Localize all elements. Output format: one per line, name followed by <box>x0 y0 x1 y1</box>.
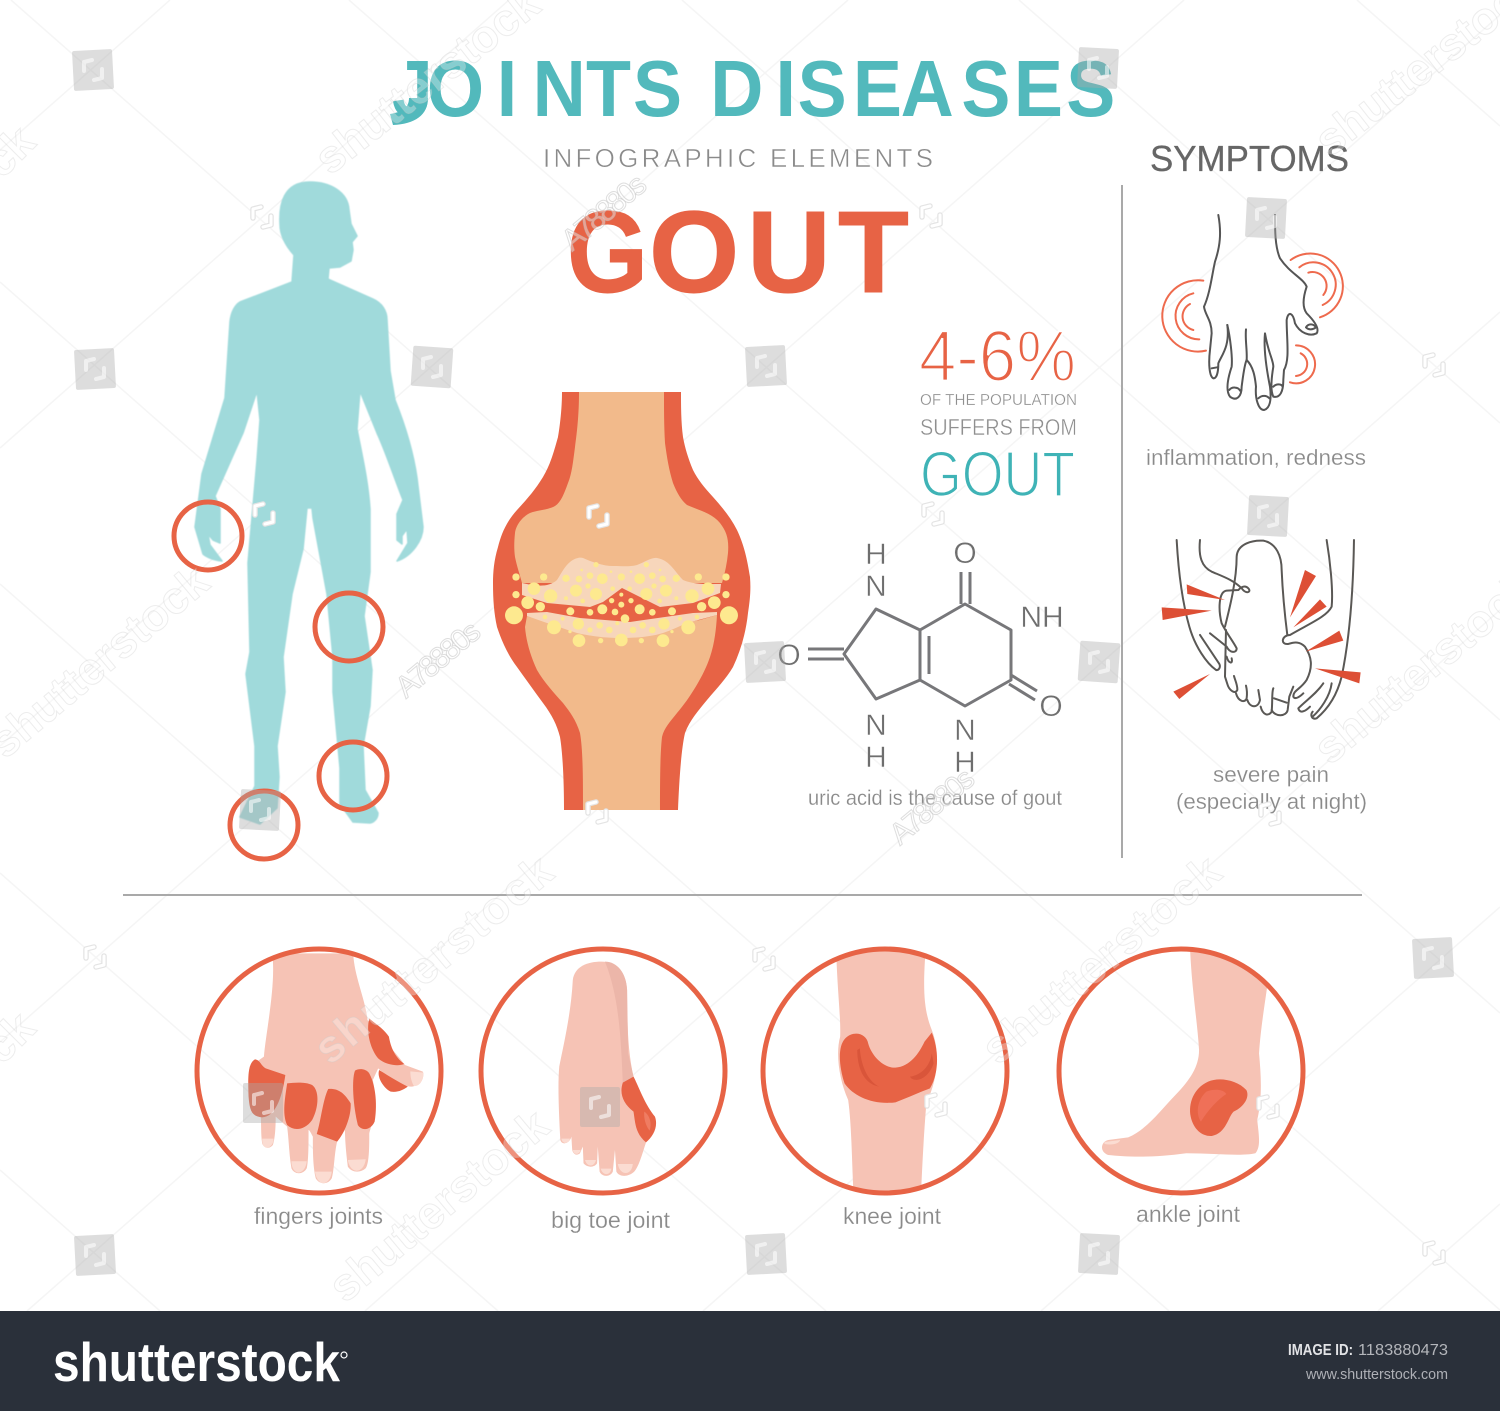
caption: fingers joints: fingers joints <box>254 1203 383 1229</box>
molecule atom labels: O <box>777 639 801 672</box>
watermark text: shutterstock <box>304 844 563 1074</box>
statistic disease name: GOUT <box>920 438 1075 510</box>
watermark outline marks <box>86 206 1443 1263</box>
molecule caption: uric acid is the cause of gout <box>808 787 1062 810</box>
uric acid molecule diagram <box>777 537 1064 810</box>
bone: upper <box>514 392 728 583</box>
human body figure with affected joints <box>174 182 423 859</box>
watermark image codes: A78880s <box>555 168 653 257</box>
footer registered mark <box>341 1352 347 1358</box>
statistic value: 4-6% <box>919 317 1076 397</box>
joint capsule <box>493 392 750 810</box>
molecule atom labels: NH <box>1020 601 1064 634</box>
joint: knee <box>763 949 1007 1229</box>
symptom caption: severe pain: (especially at night) <box>1176 789 1367 814</box>
ring: knee <box>763 949 1007 1193</box>
symptom caption: severe pain: severe pain <box>1213 762 1329 787</box>
title: JOINTS DISEASES <box>392 44 1115 134</box>
footer image id number: 1183880473 <box>1358 1342 1448 1359</box>
body silhouette <box>195 182 423 824</box>
icon: hands holding painful foot <box>1162 540 1361 719</box>
ring: big toe <box>481 949 725 1193</box>
statistic caption line 1: OF THE POPULATION <box>920 392 1077 409</box>
molecule atom labels: N <box>954 714 976 747</box>
circle: knee joint <box>315 593 383 661</box>
footer url: www.shutterstock.com <box>1305 1366 1448 1383</box>
icon: swollen knee <box>836 950 937 1197</box>
molecule atom labels: N <box>865 570 887 603</box>
cartilage: upper <box>522 558 721 607</box>
caption: big toe joint: big toe joint <box>551 1207 671 1233</box>
icon: inflamed hand <box>1162 215 1343 410</box>
symptom caption: severe pain <box>1176 762 1367 814</box>
joint cross-section illustration <box>493 392 750 810</box>
watermark image codes <box>389 168 981 851</box>
watermark marks inside squares <box>84 58 1442 1265</box>
molecule atom labels: O <box>1039 690 1063 723</box>
molecule atom labels: N <box>865 709 887 742</box>
caption: ankle joint: ankle joint <box>1136 1201 1241 1227</box>
ring: fingers <box>197 949 441 1193</box>
heading: symptoms: SYMPTOMS <box>1150 138 1349 179</box>
cartilage: lower <box>527 612 717 638</box>
footer background <box>0 1311 1500 1411</box>
heading: gout: G <box>567 187 648 317</box>
heading: gout: OUT <box>649 187 909 317</box>
watermark image codes: A78880s <box>389 615 487 704</box>
joint: fingers <box>197 949 441 1229</box>
molecule atom labels: H <box>865 741 887 774</box>
icon: swollen ankle <box>1102 947 1268 1157</box>
symptom: inflammation <box>1146 215 1366 470</box>
footer bar <box>0 1311 1500 1411</box>
bone: lower <box>525 615 717 810</box>
footer image id label: IMAGE ID: <box>1288 1342 1353 1359</box>
joint: big toe <box>481 949 725 1233</box>
circle: toe joint <box>230 791 298 859</box>
subtitle: INFOGRAPHIC ELEMENTS <box>543 143 933 173</box>
symptom: severe pain <box>1162 540 1367 814</box>
caption: knee joint: knee joint <box>843 1203 942 1229</box>
statistic block <box>919 317 1077 510</box>
molecule atom labels <box>777 537 1064 779</box>
icon: hand with swollen knuckles <box>248 953 424 1183</box>
symptom caption: inflammation: inflammation, redness <box>1146 445 1366 470</box>
statistic caption line 2: SUFFERS FROM <box>920 414 1077 440</box>
watermark text: shutterstock <box>319 1098 559 1312</box>
watermark text: shutterstock <box>972 844 1231 1074</box>
circle: ankle joint <box>319 742 387 810</box>
molecule atom labels: O <box>953 537 977 570</box>
joint: ankle <box>1059 947 1303 1227</box>
uric acid crystals <box>505 562 738 647</box>
icon: foot with swollen big toe <box>558 962 656 1176</box>
molecule atom labels: H <box>865 538 887 571</box>
circle: hand joint <box>174 502 242 570</box>
molecule bonds <box>808 572 1037 706</box>
molecule atom labels: H <box>954 746 976 779</box>
watermark image codes: A78880s <box>883 762 981 851</box>
ring: ankle <box>1059 949 1303 1193</box>
footer brand: shutterstock <box>53 1331 340 1393</box>
